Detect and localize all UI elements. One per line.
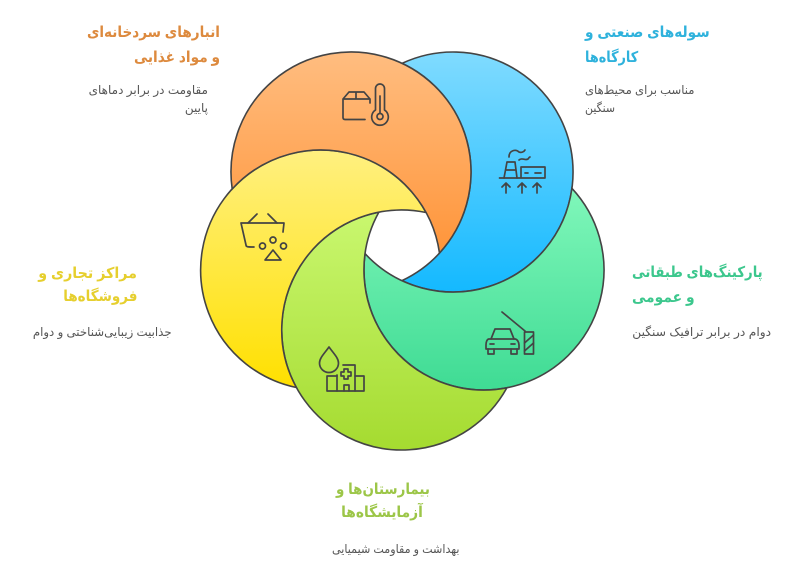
label: parking: پارکینگ‌های طبقاتی bbox=[632, 264, 763, 281]
crescent: teal bbox=[364, 188, 604, 390]
label: industrial halls bbox=[584, 24, 710, 115]
icon: basket with dots bbox=[241, 214, 286, 260]
crescent: yellow bbox=[201, 150, 426, 388]
label: hospitals bbox=[332, 481, 460, 556]
label: shopping centers: مراکز تجاری و bbox=[38, 265, 137, 282]
label: industrial halls: سوله‌های صنعتی و bbox=[585, 24, 710, 41]
icon: factory with floor arrows bbox=[500, 150, 545, 193]
label: hospitals: آزمایشگاه‌ها bbox=[341, 504, 423, 521]
label: shopping centers: جذابیت زیبایی‌شناختی و دوام bbox=[33, 325, 172, 339]
crescent: blue bbox=[402, 52, 573, 292]
label: cold storage: انبارهای سردخانه‌ای bbox=[87, 24, 220, 41]
label: cold storage bbox=[87, 24, 220, 115]
label: cold storage: و مواد غذایی bbox=[134, 49, 220, 66]
crescent: orange bbox=[231, 52, 471, 253]
icon: drop and hospital bbox=[320, 347, 364, 391]
label: shopping centers: فروشگاه‌ها bbox=[63, 288, 137, 305]
label: parking: و عمومی bbox=[632, 289, 695, 306]
label: industrial halls: کارگاه‌ها bbox=[585, 49, 638, 66]
label: shopping centers bbox=[33, 265, 172, 339]
label: hospitals: بهداشت و مقاومت شیمیایی bbox=[333, 542, 460, 556]
label: parking: دوام در برابر ترافیک سنگین bbox=[632, 325, 771, 339]
label: hospitals: بیمارستان‌ها و bbox=[336, 481, 430, 498]
label: industrial halls: مناسب برای محیط‌های bbox=[585, 83, 694, 97]
label: industrial halls: سنگین bbox=[585, 101, 615, 115]
label: cold storage: پایین bbox=[185, 101, 208, 115]
icon: box and thermometer bbox=[343, 84, 388, 125]
icon: car and parking barrier bbox=[486, 312, 534, 354]
label: parking bbox=[632, 263, 771, 339]
crescent: green bbox=[282, 212, 507, 450]
label: cold storage: مقاومت در برابر دماهای bbox=[89, 83, 208, 97]
